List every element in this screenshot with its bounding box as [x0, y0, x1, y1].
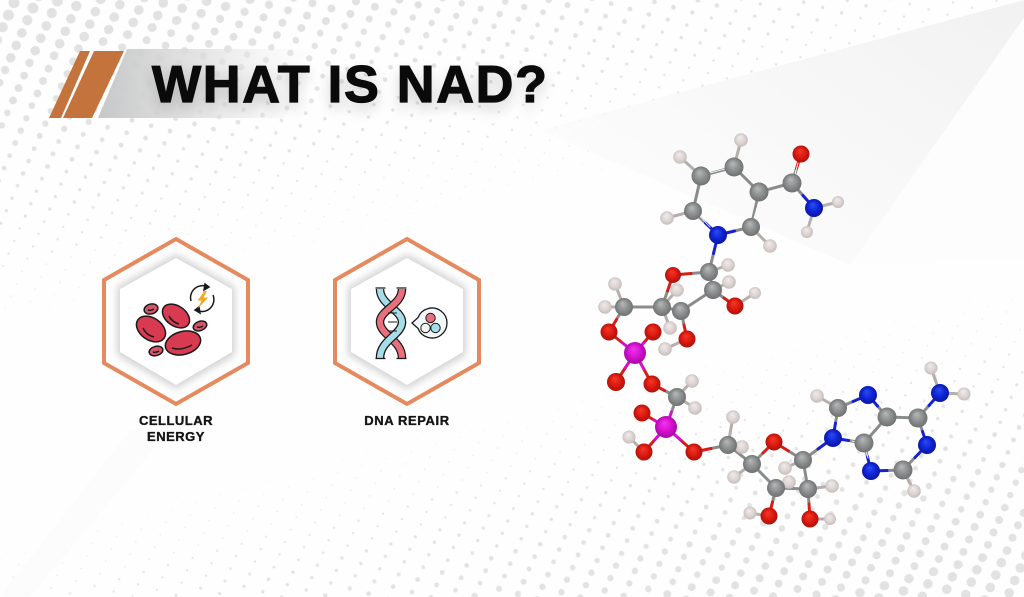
hexagon frame	[335, 239, 479, 404]
atoms: phosphorus	[624, 342, 677, 438]
icon: dna helix with molecule bubble	[376, 288, 447, 358]
label: energy: ENERGY	[147, 429, 205, 444]
label: cellular: CELLULAR	[139, 413, 213, 428]
accent stripe: thin	[49, 51, 90, 118]
grey banner strip	[98, 49, 315, 118]
atoms: carbon	[615, 158, 928, 498]
icon: red blood cells with energy cycle	[132, 284, 214, 359]
atoms: hydrogen	[598, 133, 970, 525]
accent stripe: wide	[63, 51, 124, 118]
atoms: oxygen	[600, 146, 818, 528]
label: dna repair: DNA REPAIR	[364, 413, 450, 428]
bonds	[605, 140, 964, 519]
title: WHAT IS NAD?	[152, 56, 549, 114]
atoms: nitrogen	[709, 199, 949, 480]
hexagon frame	[104, 239, 248, 404]
